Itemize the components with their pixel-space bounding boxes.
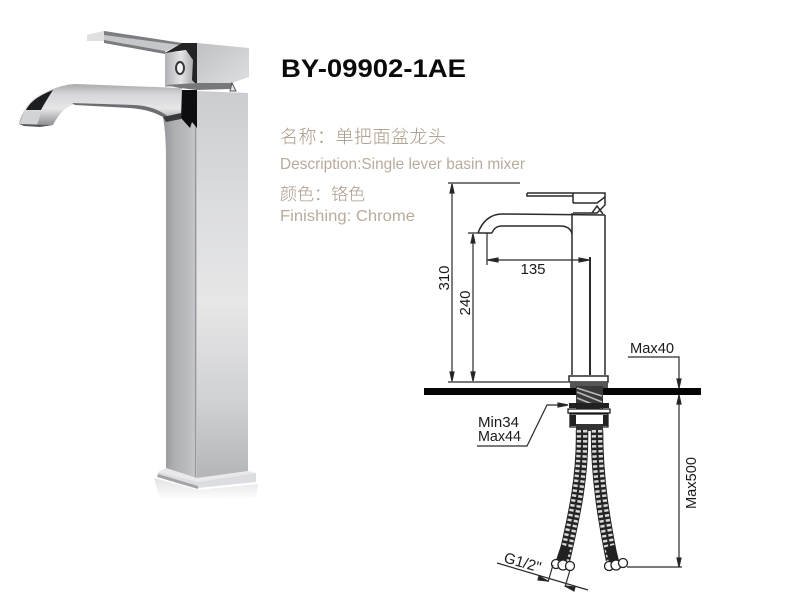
dimension Max40	[627, 340, 682, 567]
text block: finishing	[280, 185, 415, 225]
faucet outline	[478, 193, 608, 382]
lever handle	[87, 31, 182, 54]
spout tip gloss	[26, 90, 53, 110]
column right face	[197, 91, 248, 478]
hose end nuts	[552, 558, 628, 570]
dimension Min34 Max44: Min34	[478, 414, 519, 431]
handle body	[165, 43, 249, 91]
countertop	[424, 388, 701, 395]
dimension 310	[436, 183, 568, 382]
dimension 240	[457, 233, 478, 381]
column left face	[163, 91, 197, 478]
base reflection shadow	[154, 478, 258, 500]
dimension G1/2: G1/2"	[502, 550, 543, 576]
text block: name and description: Description:Single lever basin mixer	[280, 156, 526, 173]
dimension Min34 Max44	[477, 403, 568, 446]
dimension 135	[487, 233, 589, 278]
dimension Max40: Max40	[630, 340, 674, 357]
threaded shank and nuts	[568, 382, 610, 431]
text block: finishing: 颜色：铬色	[280, 185, 365, 204]
technical drawing	[424, 183, 701, 591]
dimension G1/2	[497, 550, 588, 591]
text block: finishing: Finishing: Chrome	[280, 208, 415, 225]
braided hoses	[561, 430, 614, 561]
title: BY-09902-1AE	[281, 55, 466, 83]
faucet base plate	[157, 468, 256, 489]
neck dark shadow	[181, 90, 197, 128]
dimension Min34 Max44: Max44	[478, 428, 521, 445]
dimension 310: 310	[436, 265, 453, 291]
spout lower shade	[72, 103, 170, 118]
dimension 240: 240	[457, 290, 474, 316]
dimension 135: 135	[520, 261, 546, 278]
spout	[19, 84, 182, 125]
dimension Max500: Max500	[683, 457, 700, 509]
text block: name and description	[280, 127, 526, 173]
spout tip face	[19, 110, 41, 125]
text block: name and description: 名称：单把面盆龙头	[280, 127, 446, 147]
photo: chrome basin mixer faucet	[19, 31, 258, 500]
